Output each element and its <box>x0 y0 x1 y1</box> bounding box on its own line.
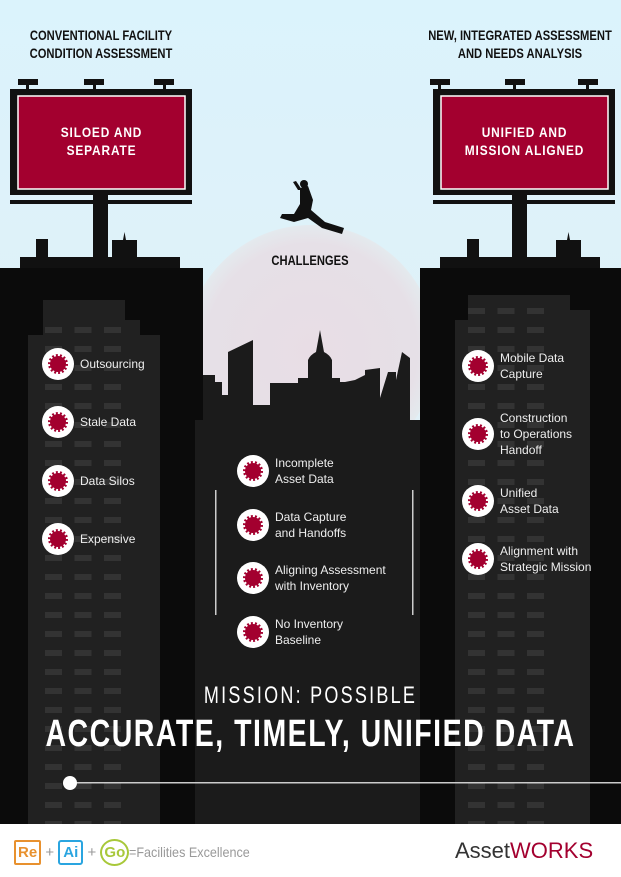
billboard text left <box>61 124 142 158</box>
footer logo left: + + <box>45 844 96 860</box>
footer logo left: Ai <box>63 844 78 860</box>
item: stale data: Stale Data <box>80 415 136 429</box>
item: aligning: with Inventory <box>275 579 349 593</box>
heading left <box>30 27 172 61</box>
left list <box>42 348 145 555</box>
billboard text left: SILOED AND <box>61 124 142 140</box>
item: data capture: Data Capture <box>275 510 346 524</box>
item: baseline: Baseline <box>275 633 321 647</box>
item: alignment: Strategic Mission <box>500 560 591 574</box>
item: data silos <box>42 465 135 497</box>
heading left: CONVENTIONAL FACILITY <box>30 27 172 43</box>
item: incomplete asset data: Asset Data <box>275 472 334 486</box>
item: construction: Handoff <box>500 443 542 457</box>
heading left: CONDITION ASSESSMENT <box>30 45 172 61</box>
heading right: NEW, INTEGRATED ASSESSMENT <box>428 27 612 43</box>
billboard text right <box>465 124 584 158</box>
item: baseline <box>237 616 343 648</box>
center list <box>237 455 386 648</box>
footer logo left <box>14 839 250 866</box>
item: alignment: Alignment with <box>500 544 578 558</box>
mission text: MISSION: POSSIBLE <box>204 682 417 709</box>
billboards <box>10 79 615 257</box>
left building <box>20 257 180 269</box>
item: mobile: Mobile Data <box>500 351 564 365</box>
item: data capture <box>237 509 346 541</box>
item: stale data <box>42 406 136 438</box>
footer logo left: Go <box>104 844 125 860</box>
footer logo right: AssetWORKS <box>455 838 593 863</box>
item: aligning <box>237 562 386 594</box>
item: expensive <box>42 523 135 555</box>
item: baseline: No Inventory <box>275 617 343 631</box>
footer logo left: Re <box>18 844 37 860</box>
billboard text right: MISSION ALIGNED <box>465 142 584 158</box>
item: outsourcing <box>42 348 145 380</box>
challenges heading: CHALLENGES <box>271 252 349 268</box>
item: construction: to Operations <box>500 427 572 441</box>
right list <box>462 350 591 575</box>
item: data silos: Data Silos <box>80 474 135 488</box>
item: unified: Asset Data <box>500 502 559 516</box>
item: incomplete asset data: Incomplete <box>275 456 334 470</box>
item: aligning: Aligning Assessment <box>275 563 386 577</box>
item: alignment <box>462 543 591 575</box>
main headline: ACCURATE, TIMELY, UNIFIED DATA <box>45 713 576 755</box>
right building <box>440 257 600 269</box>
item: construction <box>462 411 572 457</box>
item: mobile: Capture <box>500 367 543 381</box>
heading right <box>428 27 612 61</box>
billboard text right: UNIFIED AND <box>482 124 567 140</box>
item: data capture: and Handoffs <box>275 526 346 540</box>
item: outsourcing: Outsourcing <box>80 357 145 371</box>
billboard text left: SEPARATE <box>67 142 136 158</box>
item: construction: Construction <box>500 411 567 425</box>
item: unified <box>462 485 559 517</box>
icon: jumper <box>280 180 344 234</box>
center skyline <box>195 330 420 824</box>
heading right: AND NEEDS ANALYSIS <box>458 45 582 61</box>
item: unified: Unified <box>500 486 537 500</box>
item: incomplete asset data <box>237 455 334 487</box>
item: expensive: Expensive <box>80 532 135 546</box>
footer logo left: =Facilities Excellence <box>129 844 250 860</box>
item: mobile <box>462 350 564 382</box>
bottom line <box>70 782 621 784</box>
